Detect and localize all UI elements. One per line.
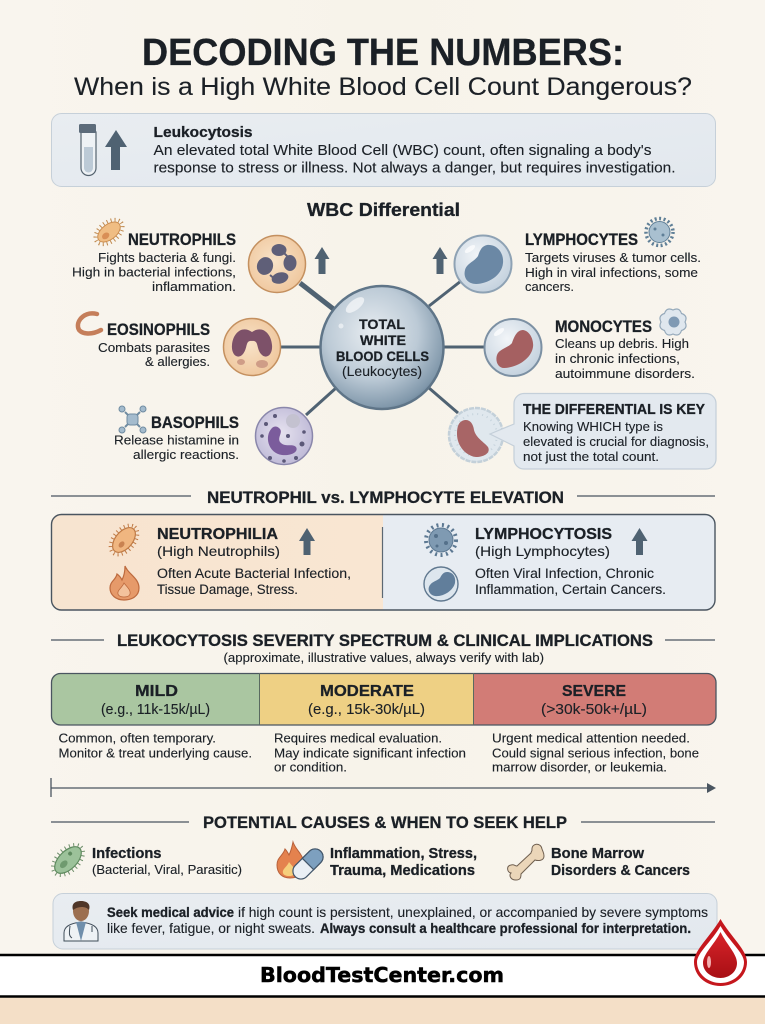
- callout: the differential is key: not just the total count.: [523, 449, 659, 464]
- text block: neutrophils: Fights bacteria & fungi.: [98, 250, 236, 265]
- hub: total white blood cells: BLOOD CELLS: [336, 349, 429, 364]
- text block: moderate implications: Requires medical evaluation.: [274, 730, 442, 746]
- text block: eosinophils: EOSINOPHILS: [107, 321, 210, 339]
- text block: advice: if high count is persistent, unexplained, or accompanied by severe symptoms: [238, 904, 708, 920]
- cause: bone marrow: [508, 844, 690, 880]
- text block: moderate implications: May indicate significant infection: [274, 746, 466, 760]
- text block: lymphocytes: LYMPHOCYTES: [525, 231, 638, 249]
- arrow: neutrophilia up: [299, 528, 315, 555]
- cell: monocyte: [484, 319, 542, 376]
- text block: leukocytosis: response to stress or illness. Not always a danger, but requires investigation.: [154, 160, 676, 176]
- severity: moderate: [308, 683, 425, 718]
- text block: leukocytosis: An elevated total White Blood Cell (WBC) count, often signaling a body's: [154, 142, 652, 159]
- panel: seek medical advice: [53, 894, 717, 949]
- cell: lymphocyte: [454, 236, 512, 292]
- sub-panel: neutrophilia: NEUTROPHILIA: [157, 526, 278, 543]
- icon: flame: [277, 842, 304, 878]
- text block: monocytes: [555, 318, 695, 381]
- cause: infections: Infections: [92, 846, 162, 862]
- heading: WBC differential: WBC Differential: [307, 200, 460, 220]
- arrow: severity axis: [51, 778, 716, 797]
- text block: neutrophils: NEUTROPHILS: [128, 231, 236, 249]
- text block: eosinophils: [98, 321, 211, 369]
- text block: mild implications: Common, often temporary.: [58, 730, 216, 746]
- icon: up arrow: [105, 130, 127, 170]
- title: [74, 32, 692, 101]
- text block: mild implications: Monitor & treat underlying cause.: [58, 746, 252, 760]
- text block: severe implications: [492, 730, 699, 774]
- sub-panel: lymphocytosis: (High Lymphocytes): [475, 543, 610, 559]
- hub: total white blood cells: (Leukocytes): [342, 364, 422, 379]
- severity: mild: MILD: [135, 683, 178, 700]
- icon: blood drop logo: [694, 919, 747, 986]
- icon: green bacterium: [47, 839, 89, 881]
- sub-panel: lymphocytosis: Inflammation, Certain Cancers.: [475, 582, 666, 597]
- text block: advice: [107, 904, 708, 936]
- severity: mild: (e.g., 11k-15k/µL): [101, 701, 210, 718]
- callout: the differential is key: elevated is crucial for diagnosis,: [523, 434, 709, 449]
- cell: activated lymphocyte: [449, 408, 503, 462]
- text block: neutrophils: inflammation.: [152, 279, 236, 294]
- callout: the differential is key: THE DIFFERENTIAL IS KEY: [523, 402, 705, 418]
- icon: bacterium: [91, 215, 127, 249]
- text block: advice: Always consult a healthcare professional for interpretation.: [320, 920, 691, 936]
- cause: bone marrow: Bone Marrow: [551, 846, 645, 862]
- icon: histamine molecule: [119, 406, 146, 433]
- text block: severe implications: Could signal serious infection, bone: [492, 746, 699, 760]
- cause: inflammation and stress: Inflammation, Stress,: [330, 846, 477, 862]
- severity: moderate: (e.g., 15k-30k/µL): [308, 701, 425, 718]
- text block: mild implications: [58, 730, 252, 760]
- connector lines: [280, 281, 485, 415]
- text block: lymphocytes: [525, 231, 701, 294]
- sub-panel: neutrophilia: (High Neutrophils): [157, 543, 280, 559]
- arrow: neutrophils up: [314, 247, 330, 274]
- sub-panel: lymphocytosis: [424, 525, 666, 601]
- severity: mild: [101, 683, 210, 718]
- chart: severity bar: [51, 673, 716, 725]
- text block: lymphocytes: cancers.: [525, 279, 574, 294]
- hub: total white blood cells: TOTAL: [359, 317, 405, 332]
- arrow: lymphocytosis up: [632, 528, 648, 555]
- text block: neutrophils: High in bacterial infections,: [72, 264, 236, 280]
- panel: neutrophil vs lymphocyte comparison: [51, 514, 715, 610]
- text block: moderate implications: or condition.: [274, 760, 347, 774]
- icon: bone: [508, 844, 544, 880]
- cell: neutrophil: [248, 236, 306, 292]
- cell: eosinophil: [224, 318, 280, 376]
- severity: severe: SEVERE: [562, 683, 626, 700]
- text block: basophils: allergic reactions.: [133, 447, 239, 462]
- icon: flame: [110, 566, 139, 600]
- chart: WBC differential hub and spokes: [72, 215, 716, 469]
- text block: basophils: Release histamine in: [114, 432, 239, 448]
- severity: severe: [541, 683, 647, 718]
- text block: lymphocytes: Targets viruses & tumor cells.: [525, 250, 701, 265]
- icon: macrophage: [660, 309, 686, 335]
- heading: severity spectrum: [117, 632, 653, 665]
- cause: infections: [47, 839, 242, 881]
- sub-panel: neutrophilia: Tissue Damage, Stress.: [157, 582, 298, 597]
- icon: virus: [426, 525, 456, 555]
- cause: bone marrow: Disorders & Cancers: [551, 863, 690, 879]
- severity: severe: (>30k-50k+/µL): [541, 701, 647, 718]
- arrow: lymphocytes up: [432, 247, 448, 274]
- heading: severity spectrum: LEUKOCYTOSIS SEVERITY SPECTRUM & CLINICAL IMPLICATIONS: [117, 632, 653, 650]
- icon: bacterium: [105, 520, 143, 560]
- heading: severity spectrum: (approximate, illustrative values, always verify with lab): [224, 651, 544, 665]
- heading: potential causes: POTENTIAL CAUSES & WHEN TO SEEK HELP: [203, 814, 567, 832]
- text block: lymphocytes: High in viral infections, some: [525, 265, 698, 280]
- text block: monocytes: autoimmune disorders.: [555, 366, 695, 381]
- sub-panel: lymphocytosis: LYMPHOCYTOSIS: [475, 526, 612, 543]
- icon: virus: [646, 218, 673, 246]
- footer band: [0, 955, 765, 996]
- text block: basophils: BASOPHILS: [151, 414, 239, 432]
- panel: leukocytosis definition: [52, 114, 716, 186]
- sub-panel: lymphocytosis: Often Viral Infection, Chronic: [475, 566, 654, 581]
- bottom strip: [0, 997, 765, 1024]
- heading: neutrophil vs lymphocyte elevation: NEUTROPHIL vs. LYMPHOCYTE ELEVATION: [207, 489, 564, 507]
- text block: eosinophils: & allergies.: [145, 354, 210, 369]
- cell: basophil: [256, 408, 312, 464]
- severity: moderate: MODERATE: [320, 683, 414, 700]
- callout: the differential is key: Knowing WHICH type is: [523, 419, 663, 434]
- icon: parasite worm: [78, 313, 101, 333]
- text block: moderate implications: [274, 730, 466, 774]
- title: When is a High White Blood Cell Count Dangerous?: [74, 73, 692, 101]
- icon: pill: [290, 846, 326, 882]
- text block: severe implications: Urgent medical attention needed.: [492, 730, 690, 746]
- icon: lymphocyte: [424, 567, 458, 601]
- text block: monocytes: MONOCYTES: [555, 318, 652, 336]
- callout: the differential is key: [490, 394, 716, 469]
- hub: total white blood cells: WHITE: [360, 333, 406, 348]
- text block: leukocytosis: [154, 124, 676, 176]
- icon: doctor: [64, 901, 98, 941]
- text block: monocytes: in chronic infections,: [555, 351, 680, 366]
- hub: total white blood cells: [320, 286, 444, 409]
- text block: advice: like fever, fatigue, or night sweats.: [107, 920, 315, 936]
- icon: test tube: [79, 124, 96, 176]
- text block: severe implications: marrow disorder, or leukemia.: [492, 760, 667, 774]
- text block: eosinophils: Combats parasites: [98, 340, 211, 355]
- text block: advice: Seek medical advice: [107, 904, 234, 920]
- cause: inflammation and stress: [277, 842, 477, 882]
- sub-panel: neutrophilia: Often Acute Bacterial Infection,: [157, 566, 351, 581]
- text block: neutrophils: [72, 231, 236, 294]
- cause: infections: (Bacterial, Viral, Parasitic): [92, 863, 242, 877]
- text block: basophils: [114, 414, 239, 462]
- footer band: BloodTestCenter.com: [260, 963, 504, 987]
- cause: inflammation and stress: Trauma, Medications: [330, 863, 475, 879]
- text block: monocytes: Cleans up debris. High: [555, 336, 689, 351]
- text block: leukocytosis: Leukocytosis: [154, 124, 252, 141]
- sub-panel: neutrophilia: [105, 520, 351, 600]
- title: DECODING THE NUMBERS:: [142, 32, 624, 74]
